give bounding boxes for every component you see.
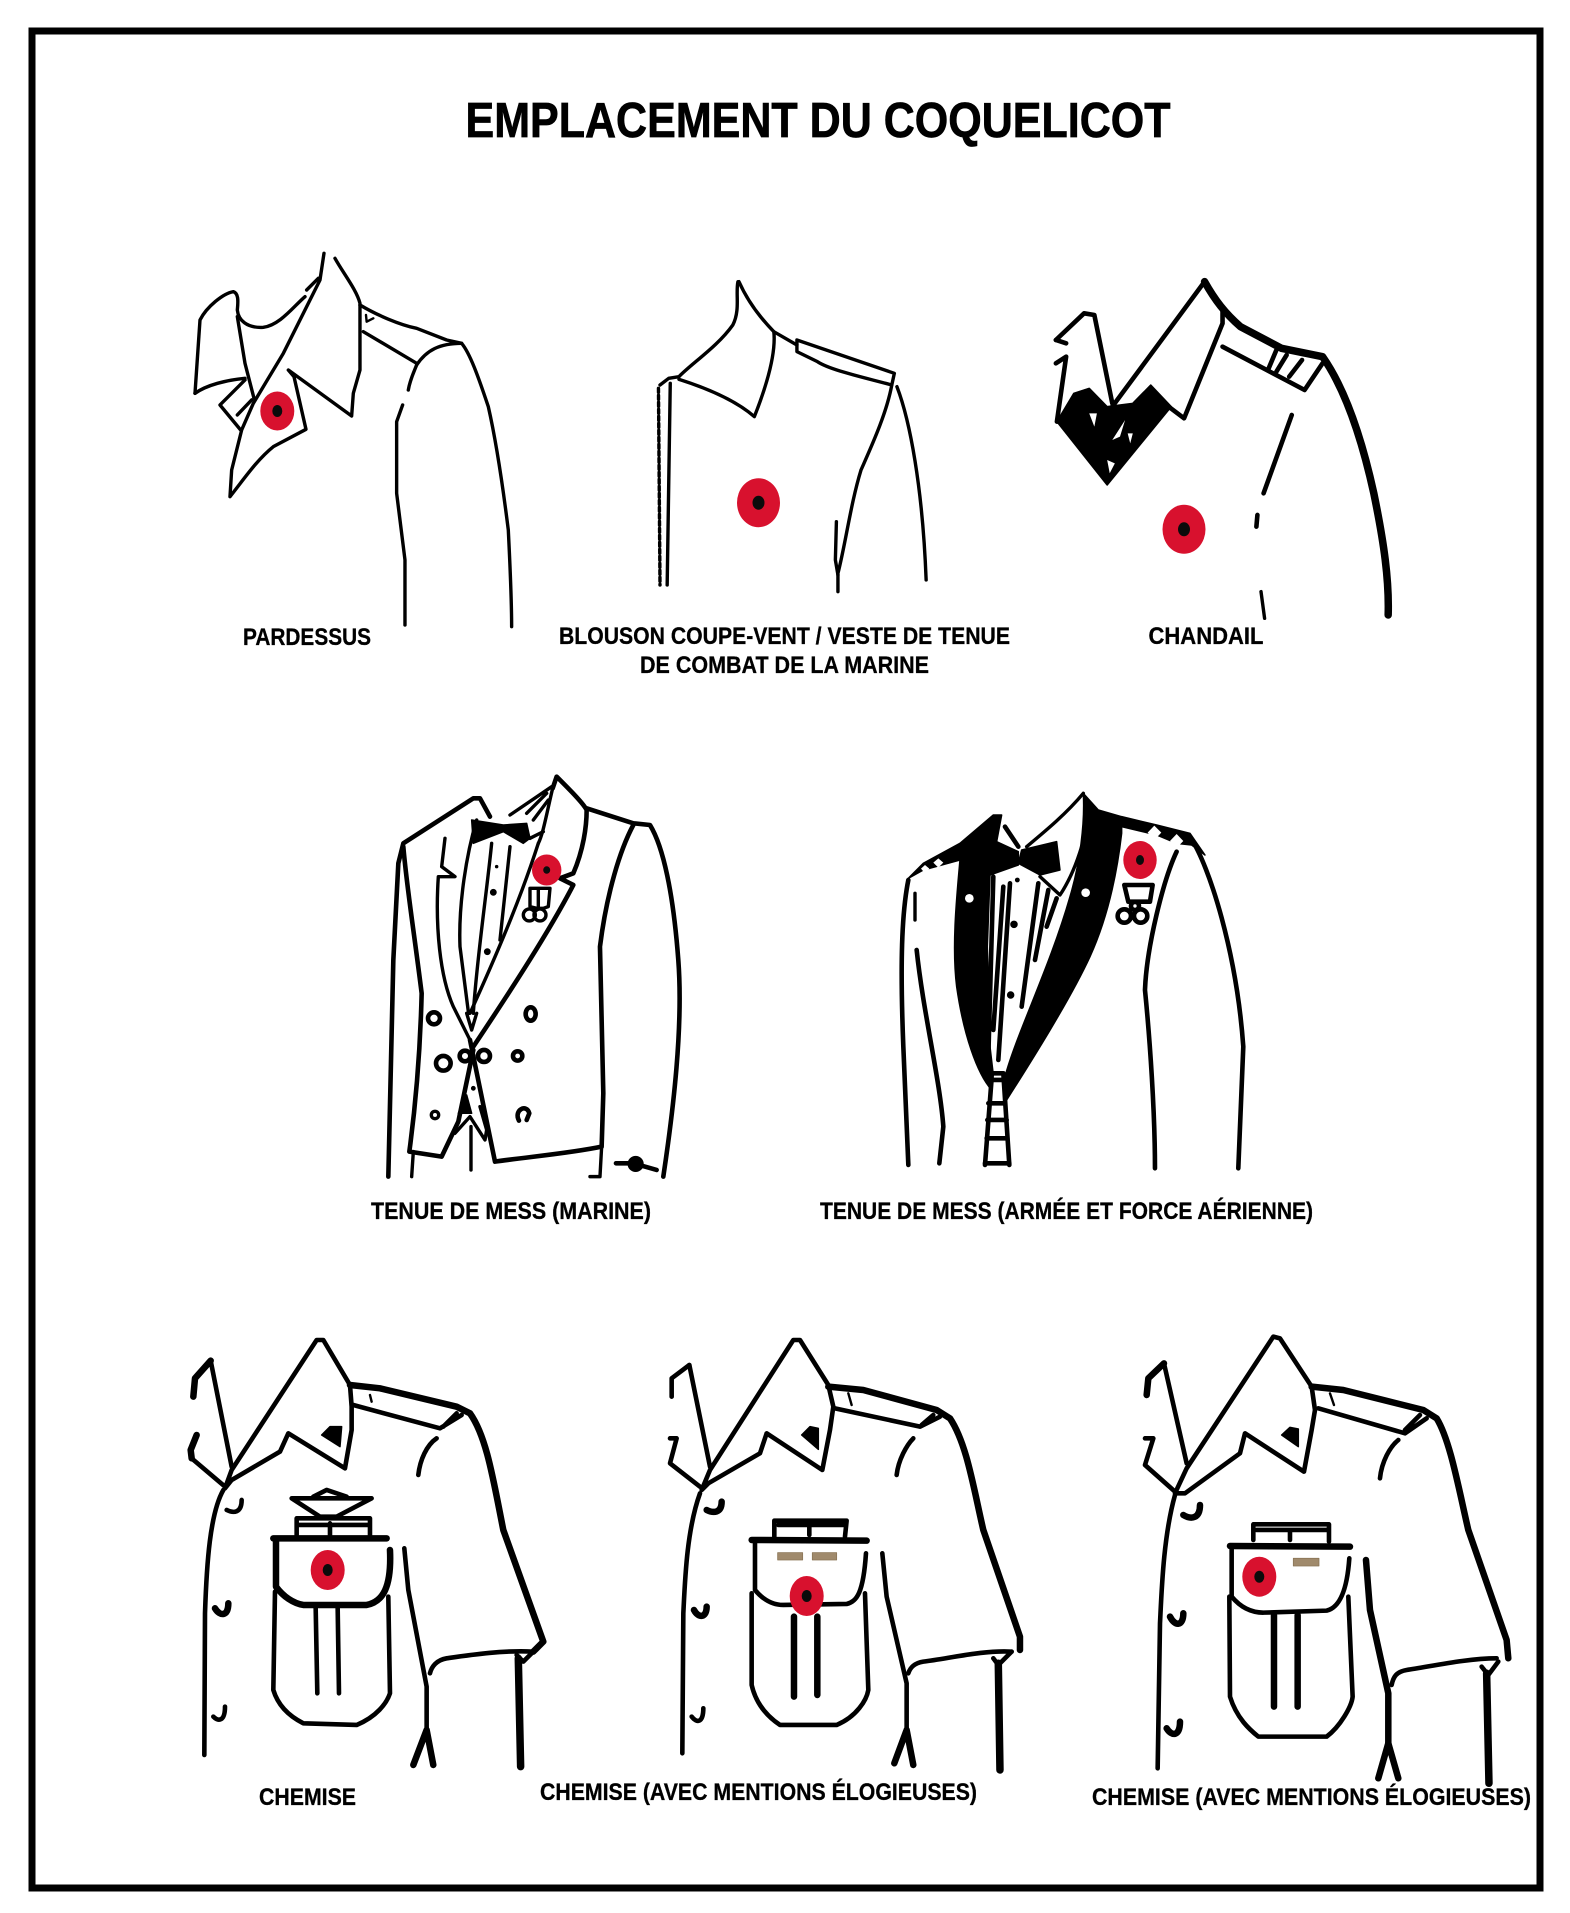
label: blouson: DE COMBAT DE LA MARINE [640, 652, 929, 679]
panel: chemise [191, 1340, 543, 1811]
label: tenue de mess marine: TENUE DE MESS (MARINE) [371, 1198, 651, 1225]
poppy [1242, 1557, 1276, 1597]
label: pardessus: PARDESSUS [243, 624, 371, 651]
panel: blouson [559, 282, 1010, 679]
poppy [1123, 841, 1157, 879]
poppy [1162, 505, 1206, 554]
drawing: sweater [1056, 282, 1388, 618]
label: tenue de mess armée: TENUE DE MESS (ARMÉE ET FORCE AÉRIENNE) [820, 1197, 1313, 1225]
panel: chandail [1056, 282, 1388, 650]
label: chemise: CHEMISE [259, 1784, 356, 1811]
panel: tenue de mess armée et force aérienne [820, 793, 1313, 1225]
panel: pardessus [195, 253, 512, 651]
drawing: shirt with wings badge [191, 1340, 543, 1767]
title: EMPLACEMENT DU COQUELICOT [466, 94, 1171, 148]
panel: tenue de mess marine [371, 777, 680, 1225]
drawing: shirt with one commendation [1145, 1337, 1508, 1783]
poppy [260, 392, 294, 430]
drawing: shirt with two commendations [670, 1340, 1020, 1770]
drawing: army and air force mess jacket [902, 793, 1243, 1168]
drawing: overcoat [195, 253, 512, 627]
poppy [532, 854, 561, 886]
label: chandail: CHANDAIL [1148, 623, 1264, 650]
drawing: windbreaker [658, 282, 926, 592]
poppy [790, 1576, 824, 1616]
label: blouson: BLOUSON COUPE-VENT / VESTE DE TENUE [559, 623, 1010, 650]
poppy [737, 478, 780, 527]
label: blouson [559, 623, 1010, 679]
panel: chemise avec mentions, poppy left of pocket [1092, 1337, 1531, 1811]
panel: chemise avec mentions, poppy on flap [540, 1340, 1020, 1806]
drawing: navy mess jacket [388, 777, 680, 1177]
poppy [311, 1550, 345, 1590]
label: chemise avec mentions: CHEMISE (AVEC MENTIONS ÉLOGIEUSES) [540, 1778, 977, 1806]
